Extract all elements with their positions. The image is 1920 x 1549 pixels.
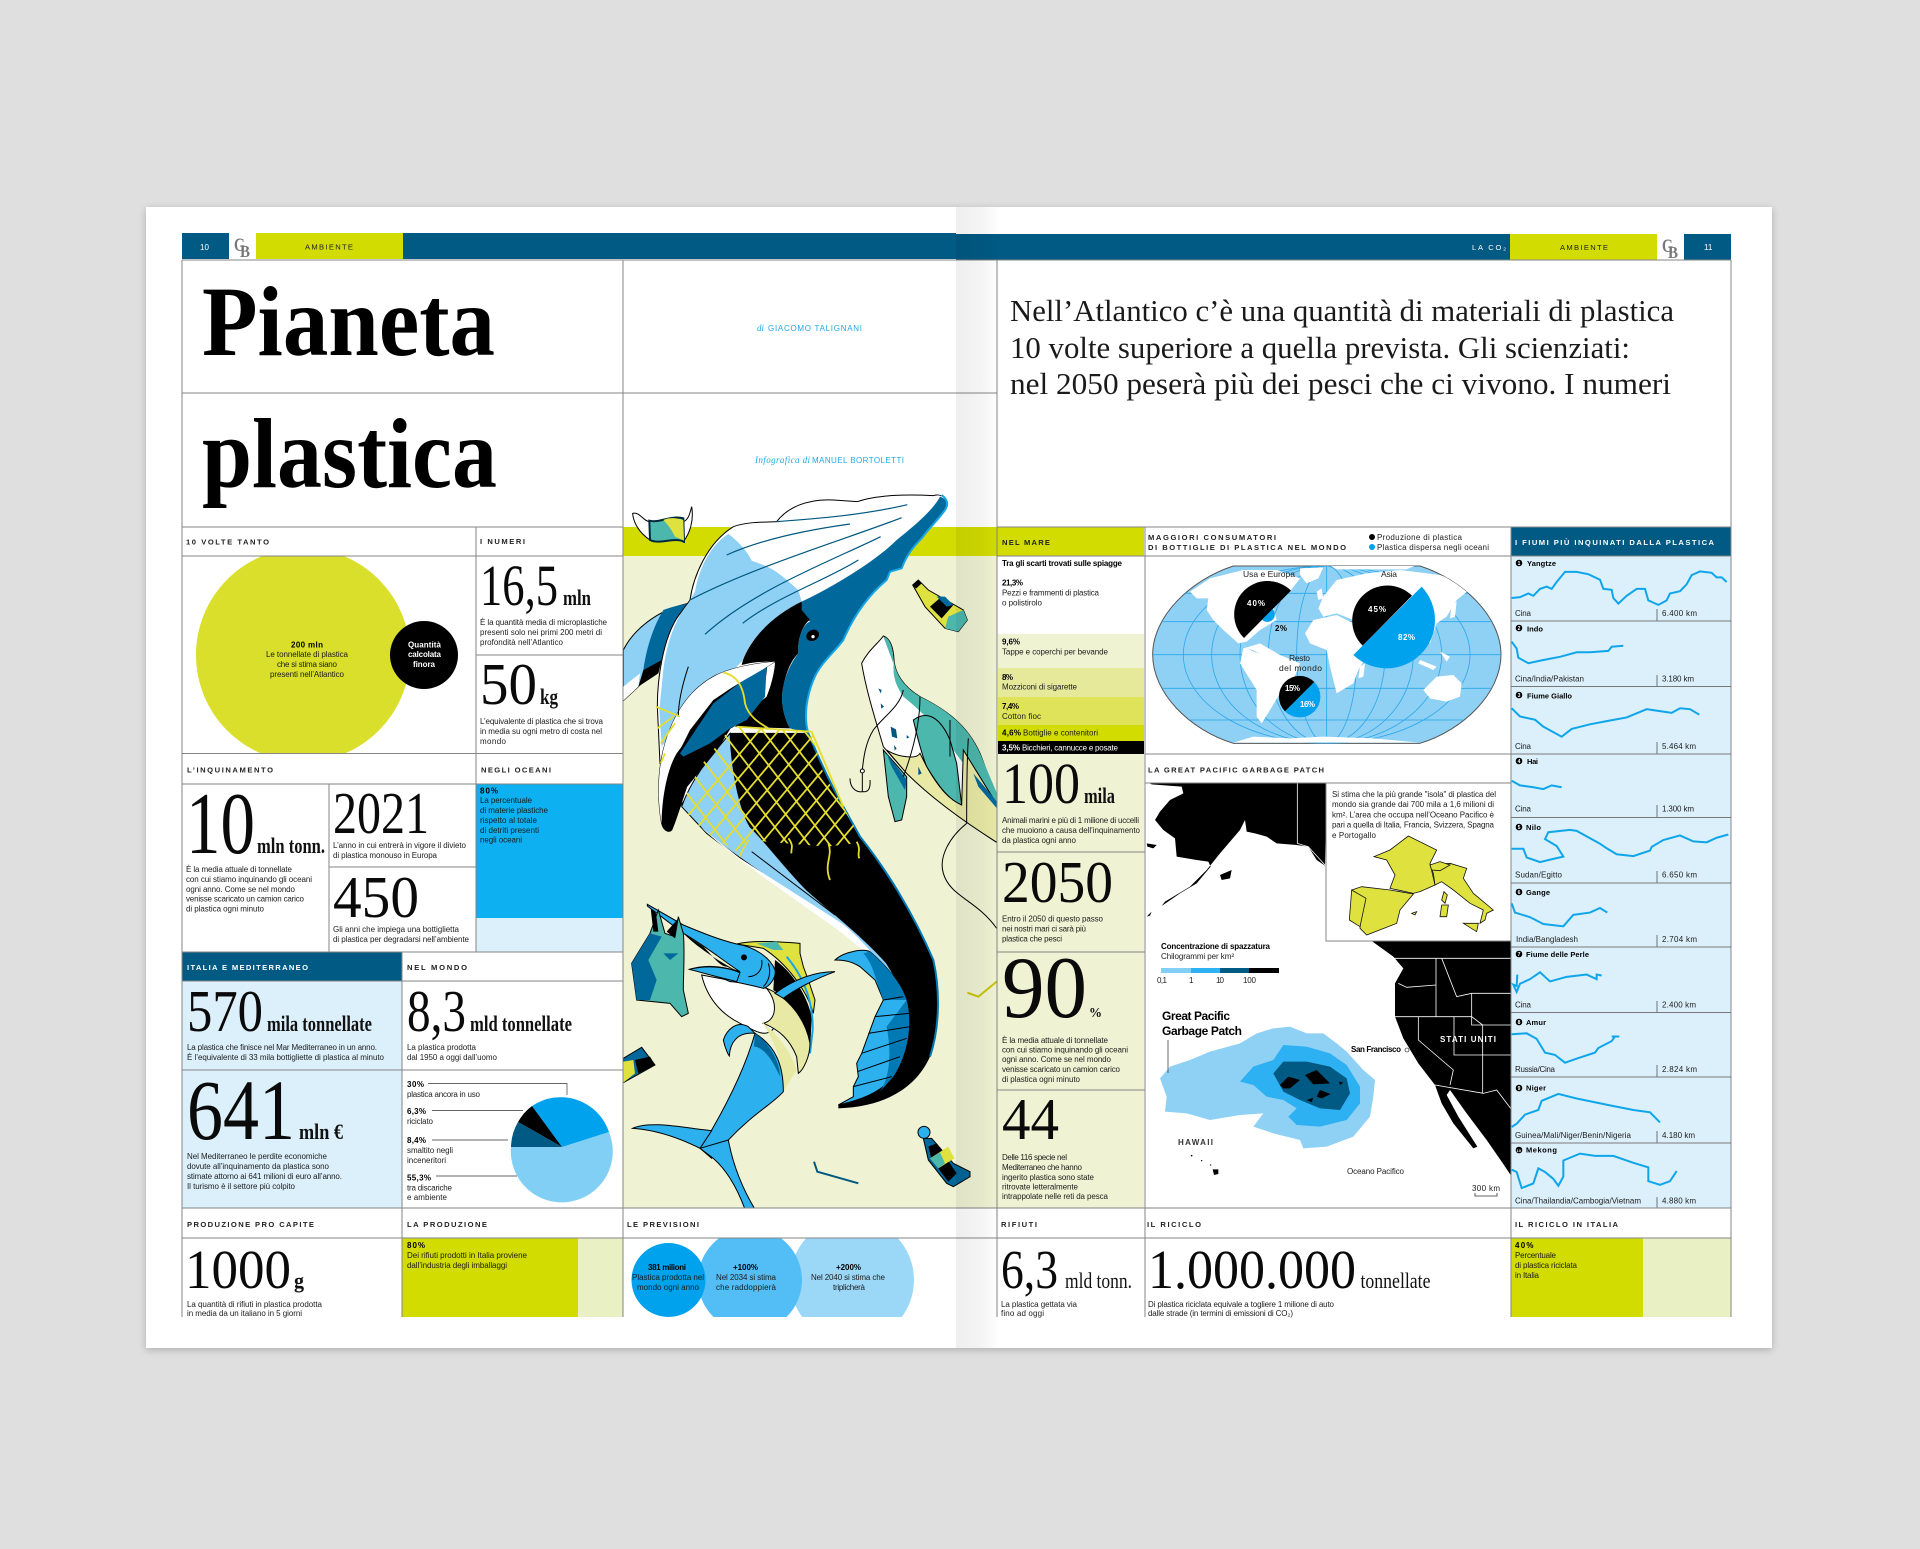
section labels: IL RICICLO IN ITALIA bbox=[1515, 1220, 1619, 1229]
stat: 1.000.000 tonnellate: dalle strade (in termini di emissioni di CO₂) bbox=[1148, 1309, 1293, 1318]
stat: 100 mila: da plastica ogni anno bbox=[1002, 836, 1077, 845]
stat: 50 kg: kg bbox=[540, 684, 558, 709]
section labels: NEL MONDO bbox=[407, 963, 467, 972]
stat: 2021: 2021 bbox=[333, 780, 429, 846]
stat: 570 mila tonnellate: La plastica che finisce nel Mar Mediterraneo in un anno. bbox=[187, 1043, 377, 1052]
stat: la produzione 80%: dall’industria degli imballaggi bbox=[407, 1261, 507, 1270]
world map with bottle consumption pies: Asia bbox=[1381, 569, 1397, 579]
credits: Infografica di bbox=[754, 455, 810, 465]
stat: 90%: venisse scaricato un camion carico bbox=[1002, 1065, 1121, 1074]
river labels: Hai bbox=[1527, 757, 1538, 766]
section labels: LA GREAT PACIFIC GARBAGE PATCH bbox=[1148, 766, 1324, 774]
inset: area comparison with European countries: mondo sia grande dai 700 mila a 1,6 milioni di bbox=[1332, 800, 1494, 809]
stat: 16,5 mln: profondità nell’Atlantico bbox=[480, 638, 564, 647]
list: scarti trovati sulle spiagge: Tra gli scarti trovati sulle spiagge bbox=[1002, 559, 1123, 568]
stat: la produzione 80% bbox=[407, 1241, 528, 1270]
stat: 6,3 mld tonn.: La plastica gettata via bbox=[1001, 1300, 1078, 1309]
stat: 44: Mediterraneo che hanno bbox=[1002, 1163, 1083, 1172]
stat: 8,3 mld tonnellate: 8,3 bbox=[407, 978, 466, 1044]
stat: 90%: È la media attuale di tonnellate bbox=[1002, 1036, 1109, 1045]
pie chart: destinazione della plastica bbox=[407, 1080, 613, 1202]
header bar: 11 bbox=[1704, 243, 1713, 252]
intro heading: nel 2050 peserà più dei pesci che ci vivono. I numeri bbox=[1010, 366, 1671, 401]
header bar: G bbox=[234, 235, 245, 256]
stat: 570 mila tonnellate: È l’equivalente di 33 mila bottigliette di plastica al minuto bbox=[187, 1053, 385, 1062]
map: Great Pacific Garbage Patch: Great Pacific bbox=[1162, 1009, 1230, 1023]
world map with bottle consumption pies bbox=[1153, 533, 1501, 743]
pie chart: destinazione della plastica: smaltito negli bbox=[407, 1146, 453, 1155]
stat: il riciclo in Italia 40%: 40% bbox=[1515, 1241, 1534, 1250]
pie chart: destinazione della plastica: 8,4% bbox=[407, 1136, 426, 1145]
section labels: RIFIUTI bbox=[1001, 1220, 1037, 1229]
title bbox=[202, 266, 497, 509]
map: Great Pacific Garbage Patch: Concentrazione di spazzatura bbox=[1161, 942, 1271, 951]
river labels: Gange bbox=[1526, 888, 1550, 897]
stat: 641 mln euro: mln € bbox=[299, 1119, 343, 1144]
map: Great Pacific Garbage Patch: Chilogrammi per km² bbox=[1161, 952, 1234, 961]
world map with bottle consumption pies: 82% bbox=[1398, 633, 1415, 642]
map: Great Pacific Garbage Patch: 100 bbox=[1243, 976, 1257, 985]
stat: 50 kg: in media su ogni metro di costa nel bbox=[480, 727, 602, 736]
stat: 570 mila tonnellate: 570 bbox=[187, 978, 263, 1044]
inset: area comparison with European countries bbox=[1326, 783, 1511, 941]
river labels: 6.650 km bbox=[1662, 870, 1697, 880]
river paths bbox=[1512, 571, 1728, 1188]
river labels: 9 bbox=[1518, 1086, 1521, 1092]
river labels: Cina/Thailandia/Cambogia/Vietnam bbox=[1515, 1196, 1641, 1206]
chart: garbage concentration zones bbox=[1160, 1027, 1375, 1148]
list: scarti trovati sulle spiagge: Bottiglie e contenitori bbox=[1023, 728, 1098, 738]
stat: 1.000.000 tonnellate: 1.000.000 bbox=[1148, 1239, 1356, 1300]
map: Great Pacific Garbage Patch: 300 km bbox=[1472, 1184, 1500, 1193]
river labels: 2.704 km bbox=[1662, 935, 1697, 944]
section labels bbox=[186, 533, 1715, 1229]
stat: 2050: nei nostri mari ci sarà più bbox=[1002, 924, 1086, 934]
chart: le previsioni circles: Nel 2040 si stima che bbox=[811, 1273, 886, 1282]
river labels: Niger bbox=[1526, 1084, 1546, 1092]
stat: 570 mila tonnellate bbox=[187, 978, 385, 1062]
stat: 1000 g bbox=[185, 1239, 323, 1318]
chart: le previsioni circles: mondo ogni anno bbox=[637, 1283, 700, 1292]
stat: 641 mln euro: Nel Mediterraneo le perdite economiche bbox=[187, 1152, 328, 1161]
pie: Usa e Europa bbox=[1234, 581, 1291, 638]
river labels: Cina bbox=[1515, 609, 1532, 618]
stat: 90%: con cui stiamo inquinando gli oceani bbox=[1002, 1046, 1128, 1054]
section labels: I FIUMI PIÙ INQUINATI DALLA PLASTICA bbox=[1515, 538, 1715, 547]
chart: 10 volte tanto circles: finora bbox=[413, 660, 436, 669]
world map with bottle consumption pies: Plastica dispersa negli oceani bbox=[1377, 543, 1489, 552]
map: Great Pacific Garbage Patch bbox=[1147, 783, 1511, 1196]
stat: il riciclo in Italia 40%: di plastica riciclata bbox=[1515, 1261, 1578, 1270]
whale head and body bbox=[657, 495, 947, 807]
stat: il riciclo in Italia 40% bbox=[1515, 1241, 1578, 1280]
chart: 10 volte tanto circles: Le tonnellate di plastica bbox=[266, 650, 349, 659]
stat: negli oceani 80%: di materie plastiche bbox=[480, 806, 549, 815]
chart: le previsioni circles: che raddoppierà bbox=[716, 1283, 777, 1292]
stat: 100 mila bbox=[1002, 751, 1141, 845]
credits: di bbox=[757, 323, 764, 333]
stat: 90%: 90 bbox=[1002, 940, 1087, 1037]
world map with bottle consumption pies: Produzione di plastica bbox=[1377, 533, 1463, 542]
map: Great Pacific Garbage Patch: Oceano Pacifico bbox=[1347, 1167, 1405, 1176]
stat: 44: ingerito plastica sono state bbox=[1002, 1173, 1095, 1182]
world map with bottle consumption pies: del mondo bbox=[1279, 663, 1322, 673]
section labels: I NUMERI bbox=[480, 537, 525, 546]
title: plastica bbox=[202, 398, 497, 509]
stat: 50 kg bbox=[480, 651, 604, 746]
inset: area comparison with European countries: km². L’area che occupa nell’Oceano Pacifico è bbox=[1332, 810, 1495, 820]
title: Pianeta bbox=[202, 266, 495, 377]
list: scarti trovati sulle spiagge: Cotton fioc bbox=[1002, 712, 1041, 721]
magazine spread page bbox=[146, 207, 1772, 1350]
icon: marlin bbox=[633, 904, 835, 1209]
river labels: 6 bbox=[1518, 890, 1521, 896]
section labels: DI BOTTIGLIE DI PLASTICA NEL MONDO bbox=[1148, 543, 1346, 552]
inset: area comparison with European countries: Si stima che la più grande "isola" di plastica del bbox=[1332, 790, 1496, 799]
section labels: IL RICICLO bbox=[1147, 1220, 1201, 1229]
list: scarti trovati sulle spiagge: 7,4% bbox=[1002, 702, 1019, 711]
stat: 10 mln tonn. bbox=[186, 776, 325, 914]
stat: 10 mln tonn.: di plastica ogni minuto bbox=[186, 904, 265, 914]
section labels: LA PRODUZIONE bbox=[407, 1220, 487, 1229]
world map with bottle consumption pies: 15% bbox=[1285, 684, 1300, 693]
list: scarti trovati sulle spiagge: o polistirolo bbox=[1002, 598, 1043, 608]
section labels: PRODUZIONE PRO CAPITE bbox=[187, 1220, 314, 1229]
river labels: 4.180 km bbox=[1662, 1131, 1695, 1140]
icon: bottle top right bbox=[913, 580, 967, 632]
stat: 16,5 mln: presenti solo nei primi 200 metri di bbox=[480, 628, 602, 637]
stat: 6,3 mld tonn. bbox=[1001, 1239, 1132, 1318]
header bar: B bbox=[240, 242, 250, 261]
pie chart: destinazione della plastica: tra discariche bbox=[407, 1184, 453, 1192]
map: ocean and land bbox=[1153, 563, 1501, 743]
map: Great Pacific Garbage Patch: San Francisco bbox=[1351, 1045, 1401, 1054]
stat: 90%: di plastica ogni minuto bbox=[1002, 1075, 1081, 1084]
stat: 44: intrappolate nelle reti da pesca bbox=[1002, 1192, 1109, 1201]
world map with bottle consumption pies: Usa e Europa bbox=[1243, 569, 1295, 579]
pie chart: destinazione della plastica: 30% bbox=[407, 1080, 424, 1089]
stat: negli oceani 80%: 80% bbox=[480, 786, 498, 796]
credits: MANUEL BORTOLETTI bbox=[812, 456, 904, 465]
stat: 1000 g: in media da un italiano in 5 giorni bbox=[187, 1309, 302, 1318]
stat: 2021: L’anno in cui entrerà in vigore il divieto bbox=[333, 841, 467, 850]
river labels: 8 bbox=[1518, 1020, 1521, 1026]
stat: 90% bbox=[1002, 940, 1128, 1084]
pie chart: destinazione della plastica: 55,3% bbox=[407, 1174, 431, 1182]
stat: 6,3 mld tonn.: mld tonn. bbox=[1065, 1268, 1132, 1293]
river labels: Russia/Cina bbox=[1515, 1065, 1556, 1074]
icon: plastic bag bbox=[632, 908, 688, 1017]
stat: 6,3 mld tonn.: fino ad oggi bbox=[1001, 1309, 1044, 1318]
river labels: 7 bbox=[1518, 952, 1521, 958]
header bar: 10 bbox=[200, 243, 209, 252]
stat: 10 mln tonn.: È la media attuale di tonnellate bbox=[186, 865, 293, 874]
header bar: LA CO₂ bbox=[1472, 243, 1506, 252]
stat: 2050 bbox=[1002, 849, 1113, 944]
list: scarti trovati sulle spiagge: 3,5% bbox=[1002, 744, 1020, 752]
header bar bbox=[182, 233, 1731, 262]
stat: 641 mln euro: dovute all’inquinamento da plastica sono bbox=[187, 1162, 330, 1171]
fishing net bbox=[656, 672, 860, 880]
section labels: MAGGIORI CONSUMATORI bbox=[1148, 533, 1276, 542]
intro heading: Nell’Atlantico c’è una quantità di materiali di plastica bbox=[1010, 293, 1674, 328]
pie chart: destinazione della plastica: 6,3% bbox=[407, 1107, 426, 1116]
stat: negli oceani 80%: La percentuale bbox=[480, 796, 533, 805]
stat: 10 mln tonn.: mln tonn. bbox=[257, 833, 325, 858]
stat: 8,3 mld tonnellate: La plastica prodotta bbox=[407, 1043, 477, 1052]
icon: bottles and straws bbox=[623, 982, 997, 1187]
stat: il riciclo in Italia 40%: Percentuale bbox=[1515, 1251, 1557, 1260]
stat: 641 mln euro: 641 bbox=[187, 1062, 295, 1158]
stat: 100 mila: che muoiono a causa dell’inquinamento bbox=[1002, 826, 1141, 835]
stat: 10 mln tonn.: con cui stiamo inquinando gli oceani bbox=[186, 875, 312, 884]
river labels: India/Bangladesh bbox=[1516, 935, 1578, 944]
stat: 50 kg: mondo bbox=[480, 737, 507, 746]
stat: 450: di plastica per degradarsi nell’ambiente bbox=[333, 935, 470, 944]
stat: 100 mila: 100 bbox=[1002, 751, 1080, 816]
stat: 10 mln tonn.: ogni anno. Come se nel mondo bbox=[186, 885, 296, 894]
world map with bottle consumption pies: 40% bbox=[1247, 599, 1265, 608]
river labels: 5 bbox=[1518, 825, 1521, 831]
world map with bottle consumption pies: 45% bbox=[1368, 605, 1386, 614]
map: France, Spain, Portugal, Italy, Switzerland bbox=[1349, 836, 1493, 935]
chart: le previsioni circles bbox=[632, 1238, 914, 1317]
whale belly and tail body bbox=[682, 733, 938, 1108]
stat: 100 mila: Animali marini e più di 1 milione di uccelli bbox=[1002, 816, 1139, 825]
world map with bottle consumption pies: Resto bbox=[1289, 653, 1310, 663]
list: scarti trovati sulle spiagge: 4,6% bbox=[1002, 728, 1021, 738]
chart: 10 volte tanto circles bbox=[196, 548, 458, 762]
stat: 90%: % bbox=[1089, 1006, 1102, 1021]
map: Great Pacific Garbage Patch: STATI UNITI bbox=[1440, 1035, 1496, 1044]
header bar: AMBIENTE bbox=[305, 242, 353, 252]
stat: 2021: di plastica monouso in Europa bbox=[333, 851, 438, 860]
map: Great Pacific Garbage Patch: HAWAII bbox=[1178, 1138, 1213, 1147]
chart: 10 volte tanto circles: che si stima siano bbox=[277, 660, 338, 669]
stat: 570 mila tonnellate: mila tonnellate bbox=[267, 1011, 372, 1036]
stat: 90%: ogni anno. Come se nel mondo bbox=[1002, 1055, 1112, 1064]
river labels: 2.400 km bbox=[1662, 1000, 1696, 1010]
whale tail fluke bbox=[835, 950, 910, 1105]
intro heading: 10 volte superiore a quella prevista. Gli scienziati: bbox=[1010, 330, 1630, 365]
chart: le previsioni circles: 381 milioni bbox=[648, 1263, 686, 1272]
map: Great Pacific Garbage Patch: 0,1 bbox=[1157, 976, 1168, 985]
stat: 44: 44 bbox=[1002, 1086, 1059, 1152]
river labels: Cina/India/Pakistan bbox=[1515, 674, 1584, 684]
stat: 100 mila: mila bbox=[1084, 783, 1115, 808]
icon: whale bbox=[624, 494, 948, 1108]
river labels: Fiume Giallo bbox=[1527, 692, 1572, 700]
river labels: Cina bbox=[1515, 804, 1532, 814]
header bar: B bbox=[1668, 243, 1678, 262]
stat: 641 mln euro bbox=[187, 1062, 343, 1191]
river labels: 4.880 km bbox=[1662, 1196, 1696, 1206]
river labels: 5.464 km bbox=[1662, 742, 1696, 751]
credits bbox=[754, 323, 904, 465]
river labels: Nilo bbox=[1526, 823, 1541, 832]
stat: 641 mln euro: Il turismo è il settore più colpito bbox=[187, 1182, 296, 1191]
stat: 8,3 mld tonnellate bbox=[407, 978, 572, 1062]
section labels: LE PREVISIONI bbox=[627, 1220, 699, 1229]
river labels: 3 bbox=[1518, 693, 1521, 699]
pie: Resto del mondo bbox=[1279, 676, 1320, 717]
river labels: Indo bbox=[1527, 624, 1543, 634]
stat: 10 mln tonn.: 10 bbox=[186, 776, 255, 873]
stat: 44: Delle 116 specie nel bbox=[1002, 1153, 1067, 1162]
river labels: 10 bbox=[1516, 1148, 1522, 1153]
chart: le previsioni circles: Plastica prodotta nel bbox=[632, 1273, 704, 1282]
stat: 44 bbox=[1002, 1086, 1109, 1201]
list: scarti trovati sulle spiagge: Tappe e coperchi per bevande bbox=[1002, 648, 1109, 656]
stat: negli oceani 80%: rispetto al totale bbox=[480, 816, 538, 825]
stat: negli oceani 80% bbox=[480, 786, 549, 844]
pie chart: destinazione della plastica: inceneritori bbox=[407, 1156, 446, 1165]
world map with bottle consumption pies: 2% bbox=[1275, 624, 1287, 633]
chart: 10 volte tanto circles: calcolata bbox=[408, 650, 442, 659]
stat: 16,5 mln bbox=[480, 553, 608, 647]
stat: 641 mln euro: stimate attorno ai 641 milioni di euro all’anno. bbox=[187, 1172, 342, 1181]
coloured cell backgrounds bbox=[182, 527, 1731, 1317]
stat: 1000 g: 1000 bbox=[185, 1239, 291, 1300]
stat: 450: Gli anni che impiega una bottiglietta bbox=[333, 925, 460, 934]
river labels: 1.300 km bbox=[1662, 804, 1694, 814]
chart: le previsioni circles: +200% bbox=[836, 1263, 861, 1272]
chart: 10 volte tanto circles: presenti nell’Atlantico bbox=[270, 670, 345, 679]
section labels: ITALIA E MEDITERRANEO bbox=[187, 963, 308, 972]
river labels: Sudan/Egitto bbox=[1515, 870, 1563, 880]
stat: 1.000.000 tonnellate: tonnellate bbox=[1360, 1268, 1430, 1293]
river labels: Fiume delle Perle bbox=[1526, 950, 1589, 959]
stat: 2050: plastica che pesci bbox=[1002, 934, 1062, 944]
whale rear fin bbox=[623, 603, 688, 701]
inset: area comparison with European countries: e Portogallo bbox=[1332, 831, 1377, 840]
pie chart: destinazione della plastica: e ambiente bbox=[407, 1193, 448, 1202]
illustration: whale, marlin, seal and plastic waste bbox=[624, 494, 996, 1208]
river charts bbox=[1512, 559, 1728, 1208]
chart: le previsioni circles: +100% bbox=[733, 1263, 758, 1272]
list: scarti trovati sulle spiagge: Bicchieri, cannucce e posate bbox=[1022, 744, 1119, 752]
section labels: 10 VOLTE TANTO bbox=[186, 538, 269, 546]
stat: 1000 g: La quantità di rifiuti in plastica prodotta bbox=[187, 1300, 323, 1309]
stat: 1000 g: g bbox=[294, 1268, 304, 1293]
credits: GIACOMO TALIGNANI bbox=[768, 324, 862, 333]
stat: 2050: Entro il 2050 di questo passo bbox=[1002, 914, 1104, 924]
chart: 10 volte tanto circles: 200 mln bbox=[291, 640, 323, 650]
river labels: Guinea/Mali/Niger/Benin/Nigeria bbox=[1515, 1131, 1632, 1140]
river labels: 4 bbox=[1518, 759, 1521, 765]
stat: 16,5 mln: È la quantità media di microplastiche bbox=[480, 618, 608, 627]
stat: 1.000.000 tonnellate: Di plastica riciclata equivale a togliere 1 milione di auto bbox=[1148, 1300, 1335, 1309]
section labels: NEGLI OCEANI bbox=[481, 766, 551, 774]
list: scarti trovati sulle spiagge: Pezzi e frammenti di plastica bbox=[1002, 588, 1100, 598]
river labels: 3.180 km bbox=[1662, 674, 1694, 684]
stat: 6,3 mld tonn.: 6,3 bbox=[1001, 1239, 1058, 1300]
header bar: G bbox=[1662, 236, 1673, 257]
river labels: Mekong bbox=[1526, 1146, 1557, 1154]
river labels: 2 bbox=[1518, 626, 1521, 632]
stat: 10 mln tonn.: venisse scaricato un camion carico bbox=[186, 894, 305, 904]
stat: 50 kg: L’equivalente di plastica che si trova bbox=[480, 717, 604, 726]
stat: 16,5 mln: mln bbox=[563, 585, 591, 610]
stat: la produzione 80%: 80% bbox=[407, 1241, 425, 1250]
river labels bbox=[1515, 559, 1697, 1208]
section labels: L’INQUINAMENTO bbox=[187, 766, 273, 774]
river labels: 1 bbox=[1518, 561, 1521, 567]
stat: negli oceani 80%: di detriti presenti bbox=[480, 826, 539, 835]
list: scarti trovati sulle spiagge: 8% bbox=[1002, 673, 1013, 682]
list: scarti trovati sulle spiagge: Mozziconi di sigarette bbox=[1002, 682, 1078, 692]
chart: le previsioni circles: triplicherà bbox=[833, 1283, 866, 1292]
list: scarti trovati sulle spiagge: 9,6% bbox=[1002, 638, 1020, 646]
intro heading bbox=[1010, 293, 1674, 401]
stat: negli oceani 80%: negli oceani bbox=[480, 836, 522, 844]
map: Alaska and Canada bbox=[1147, 783, 1327, 917]
pie chart: destinazione della plastica: plastica ancora in uso bbox=[407, 1090, 481, 1099]
marlin and floating waste bbox=[623, 904, 997, 1209]
river labels: Amur bbox=[1526, 1018, 1546, 1027]
river labels: Yangtze bbox=[1527, 559, 1556, 568]
world map with bottle consumption pies: 16% bbox=[1300, 700, 1315, 709]
river labels: 6.400 km bbox=[1662, 609, 1697, 618]
map: Great Pacific Garbage Patch: Garbage Patch bbox=[1162, 1024, 1242, 1038]
map: Great Pacific Garbage Patch: 10 bbox=[1216, 976, 1225, 985]
stat: il riciclo in Italia 40%: in Italia bbox=[1515, 1271, 1540, 1280]
stat: 450: 450 bbox=[333, 864, 419, 930]
header bar: AMBIENTE bbox=[1560, 243, 1608, 252]
spine shadow bbox=[956, 207, 1000, 1348]
whale front flipper bbox=[659, 662, 775, 831]
chart: 10 volte tanto circles: Quantità bbox=[408, 640, 442, 650]
stat: la produzione 80%: Dei rifiuti prodotti in Italia proviene bbox=[407, 1251, 528, 1260]
stat: 8,3 mld tonnellate: dal 1950 a oggi dall’uomo bbox=[407, 1053, 498, 1062]
list: scarti trovati sulle spiagge: 21,3% bbox=[1002, 578, 1023, 588]
chart: le previsioni circles: Nel 2034 si stima bbox=[716, 1273, 777, 1282]
stat: 1.000.000 tonnellate bbox=[1148, 1239, 1430, 1318]
river labels: Cina bbox=[1515, 742, 1532, 751]
inset: area comparison with European countries: pari a quella di Italia, Francia, Svizzera, Spagna bbox=[1332, 820, 1495, 830]
icon: face mask bbox=[633, 507, 692, 542]
section labels: NEL MARE bbox=[1002, 538, 1050, 547]
river labels: 2.824 km bbox=[1662, 1065, 1697, 1074]
stat: 8,3 mld tonnellate: mld tonnellate bbox=[470, 1011, 572, 1036]
river labels: Cina bbox=[1515, 1000, 1532, 1010]
list: scarti trovati sulle spiagge bbox=[998, 559, 1144, 754]
stat: 16,5 mln: 16,5 bbox=[480, 553, 558, 618]
stat: 2050: 2050 bbox=[1002, 849, 1113, 915]
pie chart: destinazione della plastica: riciclato bbox=[407, 1117, 434, 1126]
stat: 44: ritrovate letteralmente bbox=[1002, 1182, 1079, 1192]
map: Hawaii islands bbox=[1191, 1155, 1218, 1175]
whale throat grooves bbox=[690, 505, 907, 634]
stat: 450 bbox=[333, 864, 470, 944]
map: Great Pacific Garbage Patch: 1 bbox=[1189, 976, 1194, 985]
stat: 50 kg: 50 bbox=[480, 651, 537, 717]
pie: Asia bbox=[1352, 586, 1435, 668]
icon: seal bbox=[850, 636, 998, 928]
map: United States west coast bbox=[1372, 941, 1511, 1175]
